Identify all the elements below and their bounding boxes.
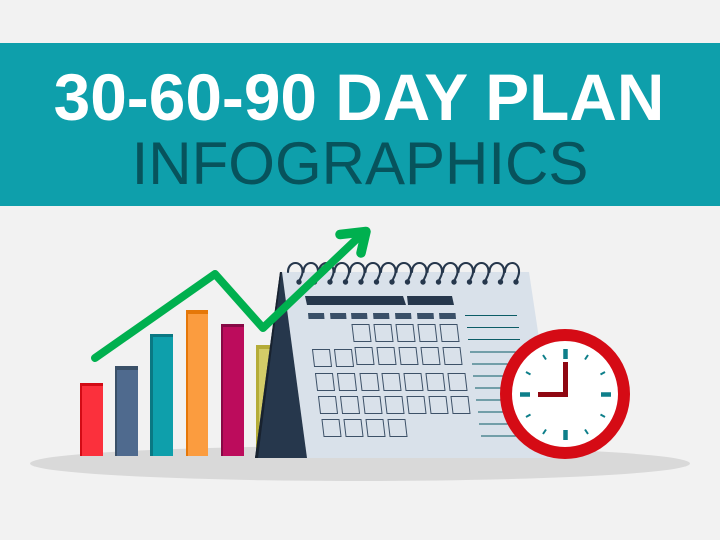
clock hands	[538, 362, 568, 397]
date grid	[312, 324, 470, 436]
bar chart	[80, 310, 280, 456]
bar: teal	[150, 334, 173, 456]
clock face	[506, 335, 624, 453]
title: 30-60-90 DAY PLAN	[54, 60, 664, 134]
bar: slate blue	[115, 366, 138, 456]
ground shadow	[30, 446, 690, 481]
subtitle: INFOGRAPHICS	[132, 130, 588, 197]
hour ticks	[520, 349, 611, 440]
green trend arrow	[95, 232, 366, 358]
weekday labels	[308, 313, 456, 319]
calendar stand	[255, 272, 307, 458]
bar: olive	[256, 345, 280, 456]
clock	[506, 335, 624, 453]
header banner	[0, 43, 720, 206]
calendar page	[282, 272, 557, 458]
ring holes	[296, 279, 519, 285]
minute ticks	[526, 355, 605, 434]
calendar	[255, 263, 557, 458]
bar: orange	[186, 310, 208, 456]
notes lines	[465, 316, 533, 436]
month header bars	[305, 296, 454, 305]
bar: red	[80, 383, 103, 456]
bar: magenta	[221, 324, 244, 456]
spiral rings	[288, 263, 519, 282]
